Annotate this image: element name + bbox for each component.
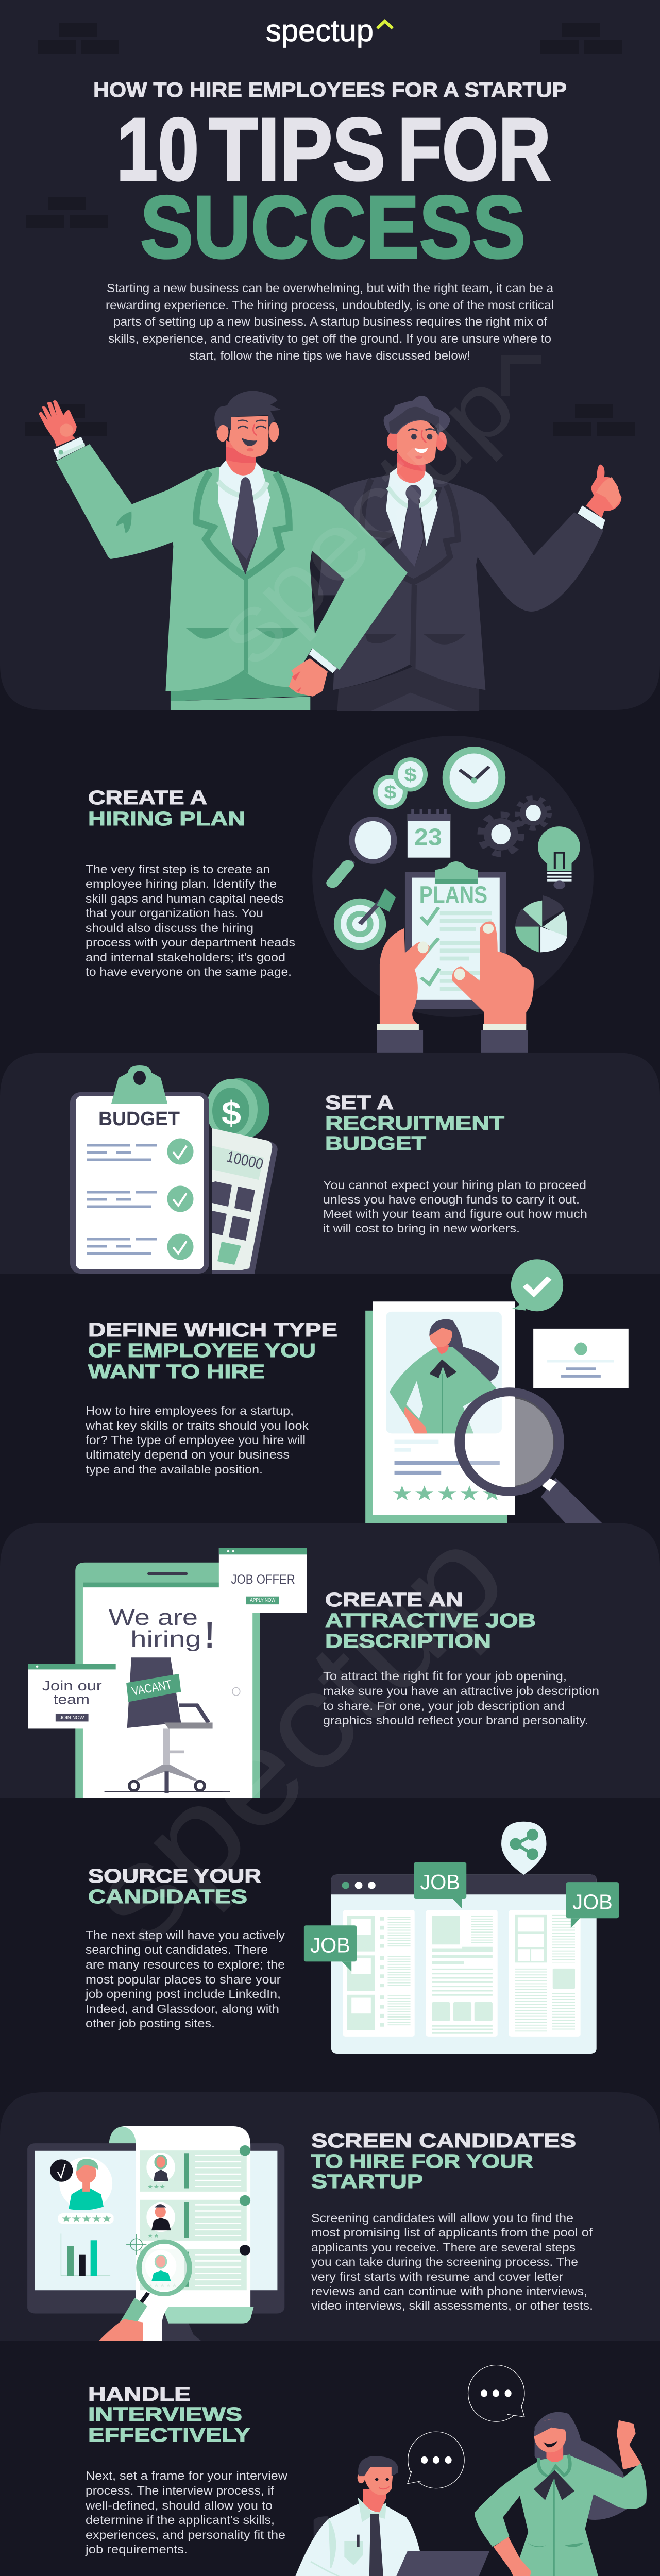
text block: employee type description: ultimately depend on your business	[86, 1448, 290, 1461]
text block: job description advice: to share. For one, your job description and	[323, 1699, 565, 1713]
hiring message	[109, 1605, 215, 1656]
text block: sourcing advice: searching out candidates. There	[86, 1943, 268, 1956]
illustration: businessman in green suit waving	[39, 391, 408, 710]
rating stars	[392, 1482, 503, 1505]
text block: sourcing advice: other job posting sites.	[86, 2016, 215, 2030]
text block: introduction: skills, experience, and creativity to get off the ground. If you are unsure where to	[108, 332, 551, 345]
text block: interview advice: well-defined, should allow you to	[85, 2499, 273, 2512]
text block: hiring plan description: to have everyone on the same page.	[86, 965, 292, 978]
heading: create a hiring plan: HIRING PLAN	[88, 808, 245, 830]
job listing column 1	[343, 1910, 415, 2037]
text block: hiring plan description: that your organization has. You	[86, 906, 263, 920]
title: success: SUCCESS	[140, 178, 526, 277]
logo: spectup: spectup	[266, 13, 374, 48]
text block: screening advice: most promising list of applicants from the pool of	[311, 2226, 593, 2239]
scroll of candidates: ★★★★★	[147, 2283, 178, 2289]
magnifying glass with candidate	[99, 2234, 190, 2341]
candidate profile on screen: ★	[81, 2214, 92, 2224]
small profile card	[533, 1329, 629, 1388]
text block: interview advice: experiences, and personality fit the	[86, 2528, 285, 2541]
calculator	[212, 1128, 278, 1274]
panel: recruitment budget background	[0, 1053, 660, 1274]
callout: job	[414, 1862, 466, 1908]
panel: screening background	[0, 2092, 660, 2341]
rating stars: ★	[459, 1482, 480, 1505]
section: source your candidates	[85, 1822, 619, 2054]
callout: job: JOB	[572, 1890, 613, 1913]
card: join our team: Join our	[42, 1679, 102, 1694]
candidate profile on screen: ★	[61, 2214, 72, 2224]
text block: employee type description	[85, 1404, 309, 1476]
scroll of candidates: ★★	[147, 2233, 159, 2239]
heading: define which type of employee you want to hire: OF EMPLOYEE YOU	[88, 1340, 316, 1362]
text block: employee type description: How to hire employees for a startup,	[86, 1404, 294, 1417]
section: define which type of employee	[85, 1259, 629, 1524]
callout: job: JOB	[310, 1934, 350, 1957]
panel: job description background	[0, 1523, 660, 1798]
callout: job	[566, 1882, 619, 1928]
heading: handle interviews effectively: HANDLE	[88, 2384, 191, 2405]
icon: light bulb	[538, 826, 580, 889]
text block: job description advice: graphics should reflect your brand personality.	[323, 1714, 588, 1727]
text block: interview advice: job requirements.	[85, 2543, 188, 2556]
candidate portrait	[390, 1319, 499, 1433]
text block: job description advice	[323, 1669, 599, 1727]
hands holding clipboard	[377, 922, 534, 1053]
text block: hiring plan description	[86, 862, 295, 978]
heading: handle interviews effectively	[88, 2384, 250, 2446]
text block: screening advice: reviews and can continue with phone interviews,	[311, 2284, 587, 2298]
heading: screen candidates to hire for your startup	[311, 2130, 576, 2193]
heading: source your candidates: CANDIDATES	[88, 1886, 247, 1908]
text block: sourcing advice: most popular places to share your	[86, 1973, 281, 1986]
chair with vacant sign	[105, 1657, 230, 1793]
candidate profile on screen: ★	[91, 2214, 102, 2224]
text block: screening advice: video interviews, skill assessments, or other tests.	[311, 2299, 593, 2312]
heading: handle interviews effectively: INTERVIEWS	[88, 2404, 242, 2426]
text block: budget description: Meet with your team and figure out how much	[323, 1207, 587, 1221]
section: screen candidates	[0, 2092, 660, 2341]
illustration: candidate profile under magnifying glass	[365, 1259, 629, 1524]
title: 10 tips for: 10	[116, 100, 199, 199]
rating stars: ★	[482, 1482, 503, 1505]
hiring message: hiring	[130, 1627, 201, 1652]
candidate profile on screen: ★	[101, 2214, 112, 2224]
scroll of candidates	[109, 2126, 254, 2341]
text block: employee type description: for? The type of employee you hire will	[86, 1433, 306, 1447]
watermark: spectup middle: spectup	[59, 1499, 533, 1973]
magnifying glass	[460, 1392, 603, 1524]
icon: dollar coin: $	[222, 1094, 241, 1131]
heading: handle interviews effectively: EFFECTIVELY	[88, 2425, 250, 2446]
icon: share pin	[501, 1822, 546, 1875]
heading: create an attractive job description: ATTRACTIVE JOB	[325, 1610, 536, 1632]
hiring message: !	[205, 1614, 215, 1656]
heading: define which type of employee you want to hire: DEFINE WHICH TYPE	[88, 1319, 337, 1341]
heading: set a recruitment budget	[325, 1092, 504, 1155]
text block: sourcing advice: are many resources to explore; the	[86, 1958, 285, 1971]
illustration: businessman in dark suit giving thumbs up	[318, 396, 621, 711]
text block: interview advice: Next, set a frame for your interview	[86, 2469, 287, 2482]
illustration: job boards in browser window	[304, 1822, 619, 2054]
title: 10 tips for: FOR	[398, 100, 551, 199]
text block: screening advice: very first starts with resume and cover letter	[311, 2270, 563, 2283]
heading: set a recruitment budget: RECRUITMENT	[325, 1113, 504, 1134]
text block: hiring plan description: The very first step is to create an	[86, 862, 270, 876]
text block: budget description: You cannot expect your hiring plan to proceed	[323, 1178, 586, 1192]
text block: introduction	[106, 281, 554, 362]
text block: sourcing advice: The next step will have you actively	[86, 1928, 285, 1942]
card: job offer: APPLY NOW	[250, 1598, 276, 1603]
card: job offer: JOB OFFER	[231, 1572, 295, 1587]
heading: source your candidates	[88, 1866, 261, 1908]
rating stars: ★	[436, 1482, 458, 1505]
heading: set a recruitment budget: SET A	[325, 1092, 394, 1114]
watermark: spectup upper: spectup	[195, 352, 534, 684]
text block: hiring plan description: should also discuss the hiring	[86, 921, 253, 935]
icon: pie chart	[515, 895, 567, 952]
icon: target	[334, 888, 396, 950]
text block: sourcing advice: Indeed, and Glassdoor, along with	[86, 2002, 279, 2015]
illustration: interview conversation	[295, 2365, 647, 2576]
callout: job: JOB	[420, 1871, 460, 1894]
calculator: 10000	[225, 1148, 265, 1173]
heading: screen candidates to hire for your startup: SCREEN CANDIDATES	[311, 2130, 576, 2152]
text block: hiring plan description: employee hiring plan. Identify the	[86, 877, 277, 890]
text block: screening advice: Screening candidates will allow you to find the	[311, 2211, 573, 2225]
rating stars: ★	[392, 1482, 413, 1505]
text block: hiring plan description: and internal stakeholders; it's good	[86, 951, 285, 964]
text block: employee type description: what key skills or traits should you look	[85, 1419, 309, 1432]
illustration: monitor with candidate screening scroll	[27, 2126, 284, 2341]
text block: sourcing advice: job opening post include LinkedIn,	[85, 1987, 281, 2001]
job listing column 3	[509, 1910, 581, 2037]
title: 10 tips for: TIPS	[209, 100, 385, 199]
chair with vacant sign: VACANT	[130, 1678, 173, 1698]
card: job offer	[219, 1548, 307, 1613]
scroll of candidates: ★★★	[147, 2184, 165, 2190]
icon: check bubble	[511, 1259, 563, 1311]
text block: budget description	[323, 1178, 587, 1235]
heading: create an attractive job description: CREATE AN	[325, 1589, 463, 1611]
hiring message: We are	[109, 1605, 198, 1630]
text block: interview advice	[85, 2469, 287, 2556]
heading: how to hire employees for a startup: HOW TO HIRE EMPLOYEES FOR A STARTUP	[93, 79, 567, 101]
icon: coins: $	[404, 765, 417, 785]
icon: clock	[443, 747, 505, 809]
text block: hiring plan description: skill gaps and human capital needs	[86, 892, 284, 905]
section: handle interviews effectively	[85, 2365, 647, 2576]
text block: screening advice	[311, 2211, 593, 2312]
title: 10 tips for	[116, 100, 551, 199]
text block: introduction: Starting a new business can be overwhelming, but with the right team, it can be a	[107, 281, 553, 295]
heading: create an attractive job description: DESCRIPTION	[325, 1631, 491, 1652]
heading: screen candidates to hire for your startup: STARTUP	[311, 2171, 423, 2193]
text block: job description advice: make sure you have an attractive job description	[323, 1684, 599, 1698]
clipboard	[70, 1065, 209, 1274]
clipboard: plans	[405, 861, 506, 1009]
text block: budget description: unless you have enough funds to carry it out.	[323, 1193, 580, 1206]
icon: calendar	[408, 809, 450, 858]
text block: hiring plan description: process with your department heads	[86, 936, 295, 949]
heading: screen candidates to hire for your startup: TO HIRE FOR YOUR	[311, 2151, 533, 2173]
card: join our team	[28, 1664, 116, 1728]
man at laptop	[295, 2456, 489, 2576]
icon: dollar coin	[206, 1078, 269, 1140]
icon: gears	[481, 798, 549, 854]
text block: introduction: parts of setting up a new business. A startup business requires the right mix of	[113, 315, 548, 328]
heading: create an attractive job description	[325, 1589, 536, 1652]
text block: sourcing advice	[85, 1928, 285, 2030]
text block: introduction: start, follow the nine tips we have discussed below!	[189, 349, 470, 362]
icon: magnifying glass	[332, 819, 394, 883]
woman waving	[475, 2412, 647, 2576]
candidate profile on screen: ★	[71, 2214, 82, 2224]
text block: budget description: it will cost to bring in new workers.	[323, 1222, 520, 1235]
clipboard: BUDGET	[98, 1108, 180, 1130]
card: join our team: team	[54, 1692, 90, 1707]
text block: interview advice: process. The interview process, if	[86, 2484, 275, 2497]
section: create a hiring plan	[86, 736, 594, 1053]
section: create an attractive job description	[0, 1523, 660, 1798]
text block: employee type description: type and the available position.	[86, 1463, 263, 1476]
heading: set a recruitment budget: BUDGET	[325, 1133, 426, 1155]
illustration: planning clipboard with icons	[312, 736, 594, 1053]
icon: coins	[373, 757, 428, 809]
panel: hero	[0, 0, 660, 710]
speech bubble	[408, 2432, 464, 2488]
illustration: budget clipboard and calculator	[70, 1065, 278, 1274]
heading: define which type of employee you want to hire	[88, 1319, 337, 1383]
candidate profile on screen	[50, 2157, 114, 2276]
card: join our team: JOIN NOW	[60, 1715, 84, 1721]
heading: define which type of employee you want to hire: WANT TO HIRE	[88, 1361, 265, 1383]
text block: screening advice: applicants you receive. There are several steps	[311, 2241, 576, 2254]
callout: job	[304, 1925, 357, 1972]
clipboard: plans: PLANS	[419, 882, 487, 908]
text block: introduction: rewarding experience. The hiring process, undoubtedly, is one of the most critical	[106, 298, 554, 312]
heading: source your candidates: SOURCE YOUR	[88, 1866, 261, 1887]
text block: interview advice: determine if the applicant's skills,	[86, 2513, 275, 2527]
section: set a recruitment budget	[0, 1053, 660, 1274]
heading: create a hiring plan	[88, 787, 245, 830]
job listing column 2	[426, 1910, 498, 2037]
icon: coins: $	[384, 782, 397, 803]
illustration: we are hiring tablet with vacant chair	[28, 1548, 307, 1798]
text block: job description advice: To attract the right fit for your job opening,	[323, 1669, 567, 1683]
rating stars: ★	[414, 1482, 435, 1505]
speech bubble	[468, 2365, 524, 2421]
heading: create a hiring plan: CREATE A	[88, 787, 207, 809]
text block: screening advice: you can take during the screening process. The	[311, 2255, 578, 2268]
icon: calendar: 23	[414, 824, 442, 851]
